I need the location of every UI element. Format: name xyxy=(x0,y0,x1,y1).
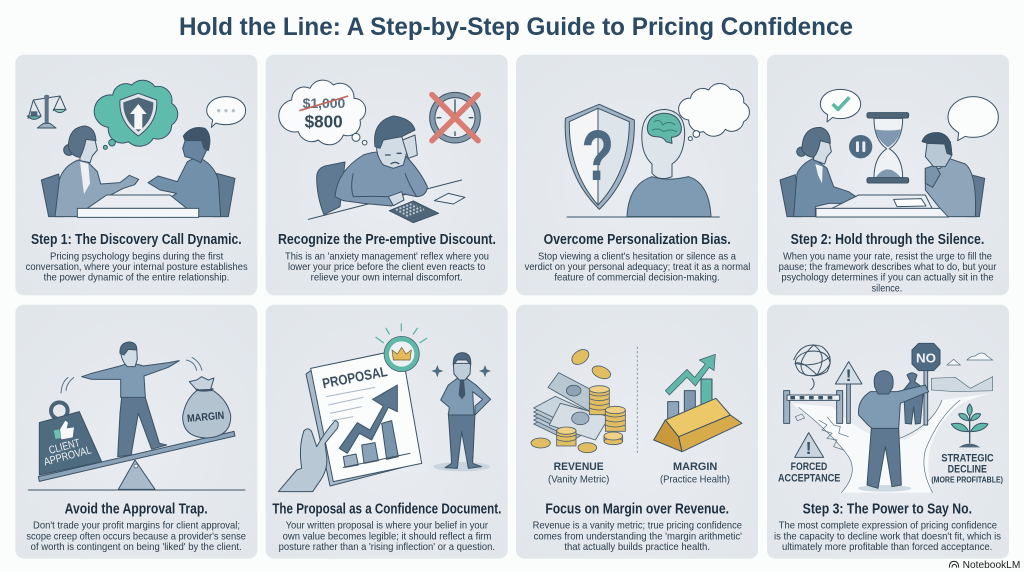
icon: warning sign on post: ! xyxy=(846,366,852,385)
icon: seedling xyxy=(951,404,988,447)
label: forced acceptance xyxy=(778,461,841,485)
panel: pre-emptive discount xyxy=(266,55,508,295)
path: white road xyxy=(792,393,992,493)
body text xyxy=(779,251,997,295)
icon: margin money bag xyxy=(183,377,231,438)
icon: sparkles xyxy=(431,365,491,377)
body text xyxy=(533,520,742,553)
illustration: man xyxy=(922,133,985,217)
thought cloud with shield xyxy=(94,80,178,149)
thought cloud with struck price: $800 xyxy=(305,111,343,131)
icon: gold bar and rising chart xyxy=(654,354,742,452)
icon: client approval weight: CLIENT xyxy=(48,437,82,457)
label: strategic decline: (MORE PROFITABLE) xyxy=(931,475,1003,485)
label: strategic decline: STRATEGIC xyxy=(941,453,994,465)
illustration: man xyxy=(148,128,235,217)
icon: balance scale xyxy=(27,95,66,128)
heading: Step 2: Hold through the Silence. xyxy=(791,232,984,248)
icon: barrier xyxy=(784,391,843,423)
illustration: small person in back xyxy=(904,373,924,424)
body text: pause; the framework describes what to do, but your xyxy=(779,262,997,273)
icon: clouds and hills xyxy=(931,353,993,392)
icon: shield with question mark xyxy=(565,104,634,209)
body text: comes from understanding the 'margin arithmetic' xyxy=(534,531,742,542)
icon: pause xyxy=(849,135,872,158)
illustration: hourglass xyxy=(867,113,909,183)
speech bubble: ellipsis xyxy=(207,97,246,127)
body text: is the capacity to decline work that doesn't fit, which is xyxy=(774,531,1001,542)
title: Hold the Line: A Step-by-Step Guide to Pricing Confidence xyxy=(179,13,853,41)
icon: brain xyxy=(647,113,681,143)
illustration: person with brain xyxy=(627,109,711,217)
body text xyxy=(774,520,1001,553)
body text: that actually builds practice health. xyxy=(564,542,710,553)
heading: Step 3: The Power to Say No. xyxy=(803,501,972,517)
illustration: man from behind xyxy=(858,371,929,492)
body text: psychology determines if you can actually sit in the xyxy=(781,273,994,284)
body text xyxy=(26,520,246,553)
illustration: woman xyxy=(41,126,139,217)
body text: Revenue is a vanity metric; true pricing confidence xyxy=(533,520,742,531)
body text xyxy=(279,520,495,553)
body text: the power dynamic of the entire relationship. xyxy=(44,273,229,284)
icon: warning sign on post xyxy=(835,362,862,423)
icon: cash and coins xyxy=(531,346,625,453)
logo: NotebookLM: NotebookLM xyxy=(963,560,1020,571)
label: forced acceptance: ACCEPTANCE xyxy=(778,473,841,485)
seesaw xyxy=(38,431,235,489)
label: revenue xyxy=(548,461,609,485)
heading: Focus on Margin over Revenue. xyxy=(545,501,729,517)
empty thought cloud xyxy=(679,84,749,141)
body text xyxy=(26,251,248,284)
table xyxy=(77,195,199,217)
body text xyxy=(525,251,750,284)
icon: margin money bag: MARGIN xyxy=(187,410,225,425)
calculator and papers xyxy=(389,193,465,223)
illustration: confident man xyxy=(433,353,491,471)
icon: stop sign NO xyxy=(912,343,940,425)
body text: verdict on your personal adequacy; treat it as a normal xyxy=(525,262,750,273)
speech bubble: check mark xyxy=(820,89,861,122)
icon: client approval weight xyxy=(39,402,102,475)
panel: Step 2 silence xyxy=(767,55,1009,295)
body text: ultimately more profitable than forced acceptance. xyxy=(782,542,992,553)
body text: This is an 'anxiety management' reflex where you xyxy=(285,251,489,262)
panel: margin over revenue xyxy=(516,305,758,559)
icon: shield with question mark: ? xyxy=(581,116,614,196)
body text: posture rather than a 'rising inflection' or a question. xyxy=(279,542,495,553)
body text: The most complete expression of pricing confidence xyxy=(779,520,997,531)
icon: crossed-out clock xyxy=(430,92,480,143)
panel: Step 1 discovery call xyxy=(15,55,257,295)
label: margin: (Practice Health) xyxy=(660,474,730,485)
panel: proposal document xyxy=(266,305,508,559)
illustration: stressed man xyxy=(317,116,427,215)
body text: of worth is contingent on being 'liked' by the client. xyxy=(31,542,242,553)
label: revenue: (Vanity Metric) xyxy=(548,474,609,485)
illustration: woman xyxy=(780,127,856,217)
thought cloud with struck price: $1,000 xyxy=(303,95,346,111)
body text: silence. xyxy=(872,284,902,295)
icon: proposal document: PROPOSAL xyxy=(321,363,389,391)
icon: warning sign: ! xyxy=(806,438,812,458)
body text: Don't trade your profit margins for client approval; xyxy=(33,520,240,531)
label: strategic decline xyxy=(931,453,1003,485)
desk line xyxy=(308,180,462,219)
motion arcs xyxy=(61,357,202,393)
panel: personalization bias xyxy=(516,55,758,295)
illustration: balancing man xyxy=(82,342,179,457)
heading: Recognize the Pre-emptive Discount. xyxy=(278,232,496,248)
icon: crown badge xyxy=(376,324,427,372)
icon: client approval weight: APPROVAL xyxy=(43,444,93,469)
body text: relieve your own internal discomfort. xyxy=(311,273,463,284)
empty speech bubble xyxy=(948,97,998,141)
label: margin xyxy=(660,461,730,485)
heading: Avoid the Approval Trap. xyxy=(65,501,208,517)
body text: Pricing psychology begins during the first xyxy=(50,251,223,262)
body text: Stop viewing a client's hesitation or silence as a xyxy=(538,251,736,262)
body text xyxy=(285,251,489,284)
body text: feature of commercial decision-making. xyxy=(554,273,720,284)
icon: warning sign xyxy=(795,433,824,458)
panel: approval trap xyxy=(15,305,257,559)
body text: scope creep often occurs because a provider's sense xyxy=(26,531,246,542)
panel: Step 3 say no xyxy=(767,305,1020,571)
body text: lower your price before the client even reacts to xyxy=(288,262,486,273)
body text: Your written proposal is where your belief in your xyxy=(286,520,488,531)
label: forced acceptance: FORCED xyxy=(791,461,827,473)
heading: Step 1: The Discovery Call Dynamic. xyxy=(31,232,242,248)
icon: tangled scribble xyxy=(794,345,830,390)
icon: stop sign NO: NO xyxy=(916,351,936,365)
icon: proposal document xyxy=(306,349,422,486)
body text: conversation, where your internal posture establishes xyxy=(26,262,248,273)
illustration: hand holding document xyxy=(278,421,338,492)
heading: Overcome Personalization Bias. xyxy=(544,232,731,248)
label: strategic decline: DECLINE xyxy=(948,464,987,476)
thought cloud with struck price xyxy=(279,80,367,145)
body text: When you name your rate, resist the urge to fill the xyxy=(783,251,992,262)
label: revenue: REVENUE xyxy=(554,461,604,473)
label: margin: MARGIN xyxy=(673,461,717,473)
body text: own value becomes legible; it should reflect a firm xyxy=(283,531,491,542)
table xyxy=(816,195,949,217)
heading: The Proposal as a Confidence Document. xyxy=(272,501,501,517)
